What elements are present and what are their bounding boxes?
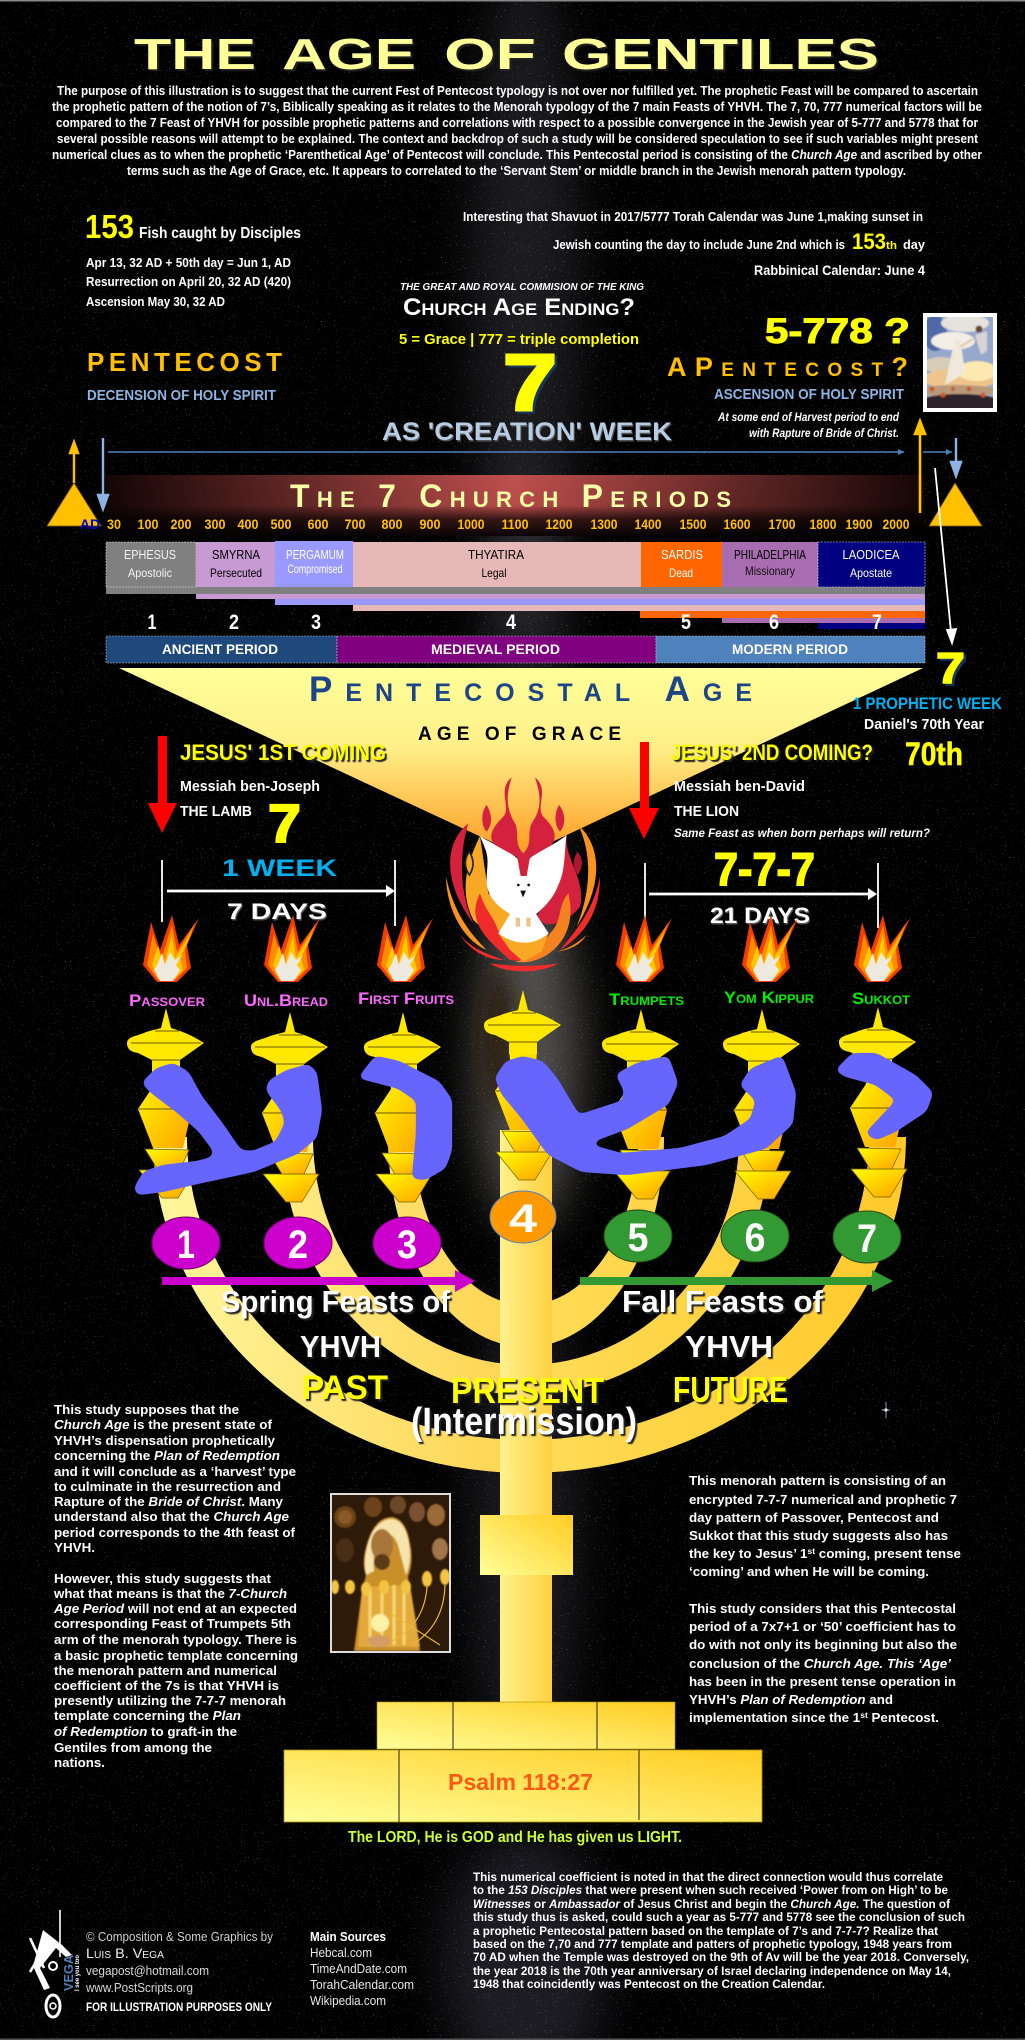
- triangle marker: left: [47, 483, 101, 526]
- timeline years: 600: [308, 516, 329, 532]
- right study text: the key to Jesus’ 1: [689, 1547, 799, 1561]
- left study text: template concerning the Plan: [54, 1709, 241, 1723]
- title: OF: [444, 30, 536, 79]
- feast labels: Unl.Bread: [244, 991, 328, 1010]
- text block: 153 fish: Ascension May 30, 32 AD: [86, 294, 225, 309]
- left study text: [53, 1403, 298, 1770]
- feast number circles: 7: [857, 1217, 877, 1261]
- timeline years: 1100: [502, 516, 529, 532]
- period bars: ANCIENT PERIOD: [162, 641, 278, 657]
- bottom study text: the year 2018 is the 70th year anniversary of Israel declaring independence on May 14,: [473, 1964, 951, 1978]
- feast number circles: 3: [397, 1223, 417, 1267]
- church numbers: 2: [229, 611, 239, 634]
- psalm reference: Psalm 118:27: [448, 1769, 593, 1795]
- timeline years: 1700: [768, 516, 796, 532]
- left study text: understand also that the Church Age: [54, 1510, 289, 1524]
- Hebrew name overlay: [136, 1055, 931, 1193]
- text block: Shavuot note: Jewish counting the day to include June 2nd which is: [553, 237, 845, 252]
- 1 week span arrow: [162, 855, 395, 926]
- timeline years: 1000: [458, 516, 485, 532]
- right label: 5-778: At some end of Harvest period to end: [717, 412, 900, 424]
- menorah captions: YHVH: [685, 1329, 773, 1364]
- menorah captions: YHVH: [300, 1329, 381, 1364]
- right label: 5-778: 5-778 ?: [765, 312, 910, 351]
- church: Ephesus: EPHESUS: [124, 547, 176, 562]
- timeline years: 300: [204, 516, 226, 532]
- right study text: This study considers that this Pentecostal: [689, 1602, 956, 1616]
- timeline years: 900: [420, 516, 441, 532]
- timeline band: 7 church periods: [105, 475, 925, 536]
- church: Thyatira: Legal: [482, 566, 506, 580]
- creation week label: AS 'CREATION' WEEK: [382, 418, 672, 446]
- right label: 5-778: ASCENSION OF HOLY SPIRIT: [714, 386, 904, 403]
- left study text: coefficient of the 7s is that YHVH is: [54, 1679, 279, 1693]
- timeline years: 500: [270, 516, 292, 532]
- painting: ascension: [917, 313, 1002, 412]
- timeline years: 1800: [810, 516, 837, 532]
- left study text: a basic prophetic template concerning: [54, 1649, 298, 1663]
- intro paragraph: the prophetic pattern of the notion of 7’s, Biblically speaking as it relates to the Menorah typology of the 7 main Feasts of YHVH. The 7, 70, 777 numerical factors will be: [52, 100, 982, 114]
- psalm verse: The LORD, He is GOD and He has given us LIGHT.: [348, 1829, 682, 1846]
- menorah arms: [153, 1137, 906, 1473]
- church: Philadelphia: PHILADELPHIA: [734, 547, 806, 562]
- text block: Shavuot note: [463, 209, 926, 278]
- center heading: church age ending: 5 = Grace | 777 = triple completion: [399, 331, 639, 348]
- text block: Shavuot note: Interesting that Shavuot in 2017/5777 Torah Calendar was June 1,making sunset in: [463, 209, 923, 224]
- bottom study text: Witnesses or Ambassador of Jesus Christ and begin the Church Age. The question of: [473, 1897, 951, 1911]
- arrow: fall feasts: [580, 1270, 893, 1292]
- text block: Shavuot note: day: [903, 237, 926, 252]
- timeline years: 700: [344, 516, 366, 532]
- left study text: However, this study suggests that: [54, 1572, 272, 1586]
- left label: pentecost: PENTECOST: [87, 347, 282, 377]
- timeline years: AD: [80, 516, 100, 532]
- credits: www.PostScripts.org: [85, 1981, 193, 1995]
- second coming text: THE LION: [674, 803, 739, 820]
- intro paragraph: compared to the 7 Feast of YHVH for possible prophetic patterns and correlations with respect to a possible convergence in the Jewish year of 5-777 and 5778 that for: [56, 116, 978, 130]
- 1 week span arrow: 7 DAYS: [227, 899, 327, 924]
- right study text: conclusion of the Church Age. This ‘Age’: [689, 1657, 952, 1671]
- church numbers: 7: [872, 611, 882, 634]
- timeline years: 200: [170, 516, 192, 532]
- left study text: presently utilizing the 7-7-7 menorah: [54, 1694, 286, 1708]
- timeline years: 1500: [680, 516, 707, 532]
- 7-7-7 span arrow: 7-7-7: [714, 843, 815, 895]
- church numbers: 1: [148, 611, 157, 634]
- timeline years: 1900: [846, 516, 873, 532]
- left study text: corresponding Feast of Trumpets 5th: [54, 1617, 291, 1631]
- left label: pentecost: [87, 347, 282, 404]
- credits: vegapost@hotmail.com: [86, 1964, 209, 1978]
- bottom study text: 1948 that coincidently was Pentecost on the Creation Calendar.: [473, 1977, 825, 1991]
- intro paragraph: several possible reasons will attempt to be explained. The context and backdrop of such a study will be considered speculation to see if such variables might present: [57, 132, 979, 146]
- right study text: Sukkot that this study suggests also has: [689, 1529, 948, 1543]
- prophetic week block: 1 PROPHETIC WEEK: [853, 694, 1003, 713]
- logo: Vega: [30, 1910, 81, 2017]
- church numbers: [148, 611, 882, 634]
- logo: Vega: VEGA: [61, 1954, 76, 1991]
- arrow: right blue down: [951, 438, 961, 476]
- timeline band: 7 church periods: The 7 Church Periods: [290, 478, 731, 514]
- bottom study text: a prophetic Pentecostal pattern based on the template of 7’s and 7-7-7? Realize that: [473, 1924, 938, 1938]
- arrow: right gold up: [915, 421, 925, 513]
- text block: 153 fish: 153: [85, 208, 134, 245]
- menorah captions: Spring Feasts of: [221, 1284, 451, 1319]
- timeline years: 800: [382, 516, 403, 532]
- right study text: This menorah pattern is consisting of an: [689, 1474, 946, 1488]
- second coming text: [671, 740, 931, 840]
- timeline years: 1400: [634, 516, 662, 532]
- left study text: YHVH’s dispensation prophetically: [54, 1434, 275, 1448]
- bottom study text: 70 AD when the Temple was destroyed on the 9th of Av will be the year 2018. Conversely,: [473, 1950, 969, 1964]
- main sources: [310, 1930, 414, 2008]
- right label: 5-778: [667, 312, 910, 440]
- title: GENTILES: [562, 30, 879, 79]
- church: Ephesus: Apostolic: [128, 566, 172, 580]
- left study text: to culminate in the resurrection and: [54, 1480, 281, 1494]
- church: Pergamum: Compromised: [288, 562, 342, 576]
- center heading: church age ending: Church Age Ending?: [403, 294, 635, 321]
- timeline years: 1300: [590, 516, 618, 532]
- text block: 153 fish: Apr 13, 32 AD + 50th day = Jun 1, AD: [86, 255, 291, 270]
- left study text: of Redemption to graft-in the: [54, 1725, 237, 1739]
- first coming text: THE LAMB: [180, 803, 252, 820]
- arrow: left blue down: [98, 438, 108, 509]
- flames: [143, 915, 910, 982]
- second coming text: Same Feast as when born perhaps will return?: [674, 826, 931, 840]
- main sources: TimeAndDate.com: [310, 1962, 407, 1976]
- feast labels: Trumpets: [609, 990, 684, 1009]
- left study text: period corresponds to the 4th feast of: [54, 1526, 296, 1540]
- main sources: Main Sources: [310, 1930, 386, 1944]
- menorah captions: PRESENT: [451, 1370, 604, 1411]
- center heading: church age ending: THE GREAT AND ROYAL COMMISION OF THE KING: [400, 281, 644, 293]
- timeline years: 2000: [882, 516, 910, 532]
- heading: pentecostal age: Pentecostal Age: [309, 670, 752, 709]
- right study text: [689, 1474, 961, 1725]
- left study text: nations.: [54, 1756, 105, 1770]
- timeline years: 100: [138, 516, 159, 532]
- left label: pentecost: DECENSION OF HOLY SPIRIT: [87, 387, 276, 404]
- church: Sardis: SARDIS: [661, 547, 703, 562]
- church period stacked bars: [106, 587, 925, 629]
- church numbers: 4: [506, 611, 516, 634]
- bottom study text: this study thus is asked, could such a year as 5-777 and 5778 see the conclusion of such: [473, 1910, 965, 1924]
- feast labels: First Fruits: [358, 989, 454, 1008]
- arrow: left gold up: [70, 442, 78, 483]
- church: Thyatira: [353, 542, 641, 587]
- text block: 153 fish: Fish caught by Disciples: [139, 225, 301, 242]
- credits: [85, 1930, 274, 2014]
- credits: © Composition & Some Graphics by: [86, 1930, 274, 1944]
- left study text: Rapture of the Bride of Christ . Many: [54, 1495, 283, 1509]
- church: Pergamum: PERGAMUM: [286, 547, 344, 562]
- right study text: do with not only its beginning but also the: [689, 1638, 957, 1652]
- 7-7-7 span arrow: [645, 843, 878, 928]
- big 7: 7: [503, 338, 557, 427]
- right study text: Pentecost.: [868, 1711, 939, 1725]
- triangle marker: right: [929, 483, 982, 526]
- left study text: and it will conclude as a ‘harvest’ type: [54, 1465, 296, 1479]
- title: [134, 30, 879, 79]
- text block: Shavuot note: 153: [852, 229, 886, 254]
- menorah captions: [221, 1284, 824, 1443]
- left study text: arm of the menorah typology. There is: [54, 1633, 297, 1647]
- first coming text: 7: [268, 794, 301, 854]
- bottom study text: based on the 7,70 and 777 template and patters of prophetic typology, 1948 years from: [473, 1937, 952, 1951]
- left study text: concerning the Plan of Redemption: [54, 1449, 280, 1463]
- intro paragraph: [52, 84, 982, 178]
- heading: pentecostal age: [309, 670, 752, 745]
- menorah captions: PAST: [302, 1369, 388, 1407]
- timeline years: [80, 516, 910, 532]
- intro paragraph: The purpose of this illustration is to suggest that the current Fest of Pentecost typology is not over nor fulfilled yet. The prophetic Feast will be compared to ascertain: [57, 84, 978, 98]
- church blocks: [106, 541, 925, 587]
- main sources: Hebcal.com: [310, 1946, 372, 1960]
- red arrow: second coming: [629, 742, 659, 839]
- church: Laodicea: [818, 542, 925, 587]
- center heading: church age ending: [399, 281, 644, 348]
- right study text: st: [807, 1547, 815, 1556]
- credits: FOR ILLUSTRATION PURPOSES ONLY: [86, 2002, 272, 2014]
- menorah captions: Fall Feasts of: [622, 1284, 824, 1319]
- second coming text: Messiah ben-David: [674, 778, 805, 795]
- credits: Luis B. Vega: [86, 1945, 164, 1961]
- text block: Shavuot note: th: [886, 240, 897, 252]
- right study text: ‘coming’ and when He will be coming.: [689, 1565, 929, 1579]
- feast labels: Yom Kippur: [724, 988, 814, 1007]
- icon: holy spirit dove in flames: [446, 777, 600, 971]
- church: Pergamum: [275, 541, 353, 587]
- text block: 153 fish: [85, 208, 301, 309]
- church: Sardis: Dead: [669, 566, 693, 580]
- right study text: coming, present tense: [815, 1547, 961, 1561]
- heading: pentecostal age: AGE OF GRACE: [418, 724, 621, 745]
- church numbers: 3: [311, 611, 321, 634]
- right study text: YHVH’s Plan of Redemption and: [689, 1693, 893, 1707]
- timeline years: 1200: [546, 516, 573, 532]
- right label: 5-778: with Rapture of Bride of Christ.: [749, 428, 899, 440]
- arrow: spring feasts: [162, 1270, 475, 1292]
- period bars: [106, 636, 925, 663]
- feast number circles: 5: [628, 1216, 648, 1260]
- feast labels: [129, 988, 911, 1010]
- menorah captions: (Intermission): [411, 1401, 637, 1443]
- feast labels: Sukkot: [852, 989, 911, 1008]
- church: Laodicea: Apostate: [850, 566, 892, 580]
- right study text: encrypted 7-7-7 numerical and prophetic 7: [689, 1493, 957, 1507]
- red arrow: first coming: [148, 736, 177, 833]
- church: Philadelphia: Missionary: [745, 564, 795, 578]
- first coming text: [180, 740, 386, 854]
- first coming text: Messiah ben-Joseph: [180, 778, 320, 795]
- timeline years: 30: [107, 516, 121, 532]
- bottom study text: to the 153 Disciples that were present when such received ‘Power from on High’ to be: [473, 1883, 948, 1897]
- timeline years: 1600: [724, 516, 751, 532]
- church: Laodicea: LAODICEA: [842, 547, 900, 562]
- left study text: Age Period will not end at an expected: [53, 1602, 297, 1616]
- prophetic week block: Daniel's 70th Year: [864, 716, 984, 733]
- left study text: what that means is that the 7-Church: [53, 1587, 287, 1601]
- church: Smyrna: [196, 542, 275, 587]
- intro paragraph: terms such as the Age of Grace, etc. It appears to correlated to the ‘Servant Stem’ or middle branch in the Jewish menorah pattern typology.: [127, 164, 906, 178]
- second coming text: JESUS' 2ND COMING?: [671, 740, 873, 765]
- church: Smyrna: SMYRNA: [212, 547, 260, 562]
- bottom study text: [473, 1870, 969, 1991]
- menorah stem and base: [284, 1130, 762, 1822]
- menorah lamps: [127, 990, 916, 1202]
- church: Smyrna: Persecuted: [210, 566, 262, 580]
- timeline arrow: age span: [108, 451, 952, 453]
- right study text: day pattern of Passover, Pentecost and: [689, 1511, 939, 1525]
- right study text: implementation since the 1: [689, 1711, 849, 1725]
- church numbers: 5: [681, 611, 691, 634]
- menorah captions: FUTURE: [673, 1369, 788, 1410]
- title: AGE: [282, 30, 416, 79]
- text block: Shavuot note: Rabbinical Calendar: June 4: [754, 262, 925, 278]
- left study text: Church Age is the present state of: [54, 1418, 273, 1432]
- intro paragraph: numerical clues as to when the prophetic ‘Parenthetical Age’ of Pentecost will conclude. This Pentecostal period is consisting of the Church Age and ascribed by other: [52, 148, 982, 162]
- feast number circles: 4: [509, 1197, 538, 1241]
- right study text: has been in the present tense operation in: [689, 1675, 956, 1689]
- arrow: white to prophetic week: [935, 468, 956, 643]
- church numbers: 6: [769, 611, 779, 634]
- prophetic week block: [853, 644, 1003, 772]
- painting: Jesus with menorah: [330, 1493, 451, 1653]
- first coming text: JESUS' 1ST COMING: [180, 740, 386, 765]
- feast labels: Passover: [129, 991, 205, 1010]
- left study text: Gentiles from among the: [54, 1741, 212, 1755]
- right study text: period of a 7x7+1 or ‘50’ coefficient has to: [689, 1620, 956, 1634]
- title: THE: [134, 30, 256, 79]
- timeline years: 400: [238, 516, 259, 532]
- left study text: This study supposes that the: [54, 1403, 239, 1417]
- logo: Vega: I see you too: [75, 1955, 81, 1991]
- bottom study text: This numerical coefficient is noted in that the direct connection would thus correlate: [473, 1870, 943, 1884]
- prophetic week block: 70th: [905, 736, 963, 772]
- period bars: MEDIEVAL PERIOD: [431, 641, 560, 657]
- church: Sardis: [641, 542, 722, 587]
- main sources: TorahCalendar.com: [310, 1978, 414, 1992]
- text block: 153 fish: Resurrection on April 20, 32 AD (420): [86, 274, 291, 289]
- right study text: st: [860, 1711, 868, 1720]
- pentecostal age light cone: [119, 668, 923, 856]
- church: Thyatira: THYATIRA: [468, 547, 524, 562]
- feast number circles: 1: [177, 1223, 195, 1267]
- period bars: MODERN PERIOD: [732, 641, 848, 657]
- church: Ephesus: [106, 542, 196, 587]
- 7-7-7 span arrow: 21 DAYS: [710, 903, 810, 928]
- 1 week span arrow: 1 WEEK: [222, 855, 338, 882]
- left study text: the menorah pattern and numerical: [54, 1664, 277, 1678]
- prophetic week block: 7: [936, 644, 965, 693]
- right label: 5-778: APentecost?: [667, 352, 908, 382]
- main sources: Wikipedia.com: [310, 1994, 386, 2008]
- feast number circles: [152, 1191, 901, 1269]
- feast number circles: 2: [288, 1223, 308, 1267]
- church: Philadelphia: [722, 542, 818, 587]
- feast number circles: 6: [744, 1216, 766, 1260]
- left study text: YHVH.: [54, 1541, 95, 1555]
